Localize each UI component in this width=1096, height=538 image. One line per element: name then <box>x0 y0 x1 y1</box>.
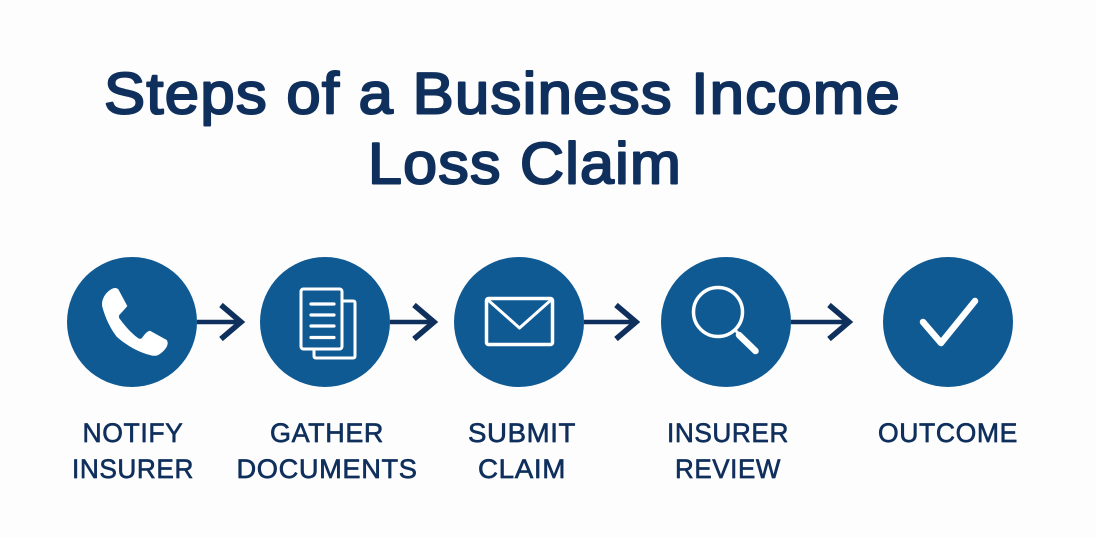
label: gather documents: GATHER <box>270 418 384 448</box>
label: insurer review: REVIEW <box>675 454 781 484</box>
label: outcome: OUTCOME <box>878 418 1018 448</box>
title: Loss Claim <box>368 132 682 196</box>
label: insurer review <box>667 418 789 484</box>
label: submit claim: SUBMIT <box>468 418 576 448</box>
arrow 1 <box>197 305 241 339</box>
arrow 2 <box>390 305 434 339</box>
label: gather documents: DOCUMENTS <box>236 454 418 484</box>
step 3: submit claim <box>454 257 584 484</box>
label: notify insurer: INSURER <box>72 454 194 484</box>
step 1: notify insurer <box>67 257 197 484</box>
step 5: outcome <box>878 257 1018 448</box>
label: gather documents <box>236 418 418 484</box>
icon: documents <box>260 257 390 387</box>
step 4: insurer review <box>661 257 791 484</box>
step 2: gather documents <box>236 257 418 484</box>
arrow 3 <box>584 305 636 339</box>
icon: phone <box>67 257 197 387</box>
label: notify insurer: NOTIFY <box>82 418 184 448</box>
title <box>104 62 901 196</box>
label: submit claim <box>468 418 576 484</box>
label: submit claim: CLAIM <box>478 454 566 484</box>
label: notify insurer <box>72 418 194 484</box>
title: Steps of a Business Income <box>104 62 901 126</box>
arrow 4 <box>791 305 849 339</box>
label: insurer review: INSURER <box>667 418 789 448</box>
icon: magnifier <box>661 257 791 387</box>
icon: check mark <box>883 257 1013 387</box>
icon: envelope <box>454 257 584 387</box>
